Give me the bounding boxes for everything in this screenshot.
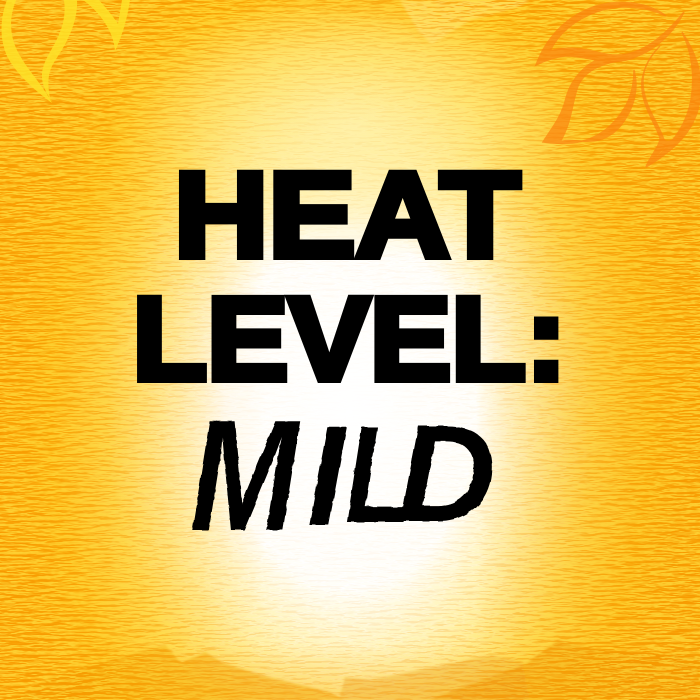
icon: orange leaf outline, top right <box>536 2 700 167</box>
brush lettering: MILD: I <box>307 398 347 556</box>
brush lettering: MILD: L <box>345 398 412 552</box>
brush lettering: MILD: D <box>398 396 496 550</box>
icon: yellow leaf outline, top left <box>2 0 130 103</box>
heading line: LEVEL:: LEVEL: <box>132 274 566 406</box>
brush lettering: MILD <box>190 387 496 564</box>
bottom mountain silhouettes <box>13 640 700 700</box>
pale upper glow behind the heading <box>110 0 590 260</box>
brush lettering: MILD: M <box>190 387 300 564</box>
heading: HEAT LEVEL: <box>132 146 566 406</box>
top torn paper patches <box>205 0 560 45</box>
heading line: HEAT: HEAT <box>174 146 520 282</box>
